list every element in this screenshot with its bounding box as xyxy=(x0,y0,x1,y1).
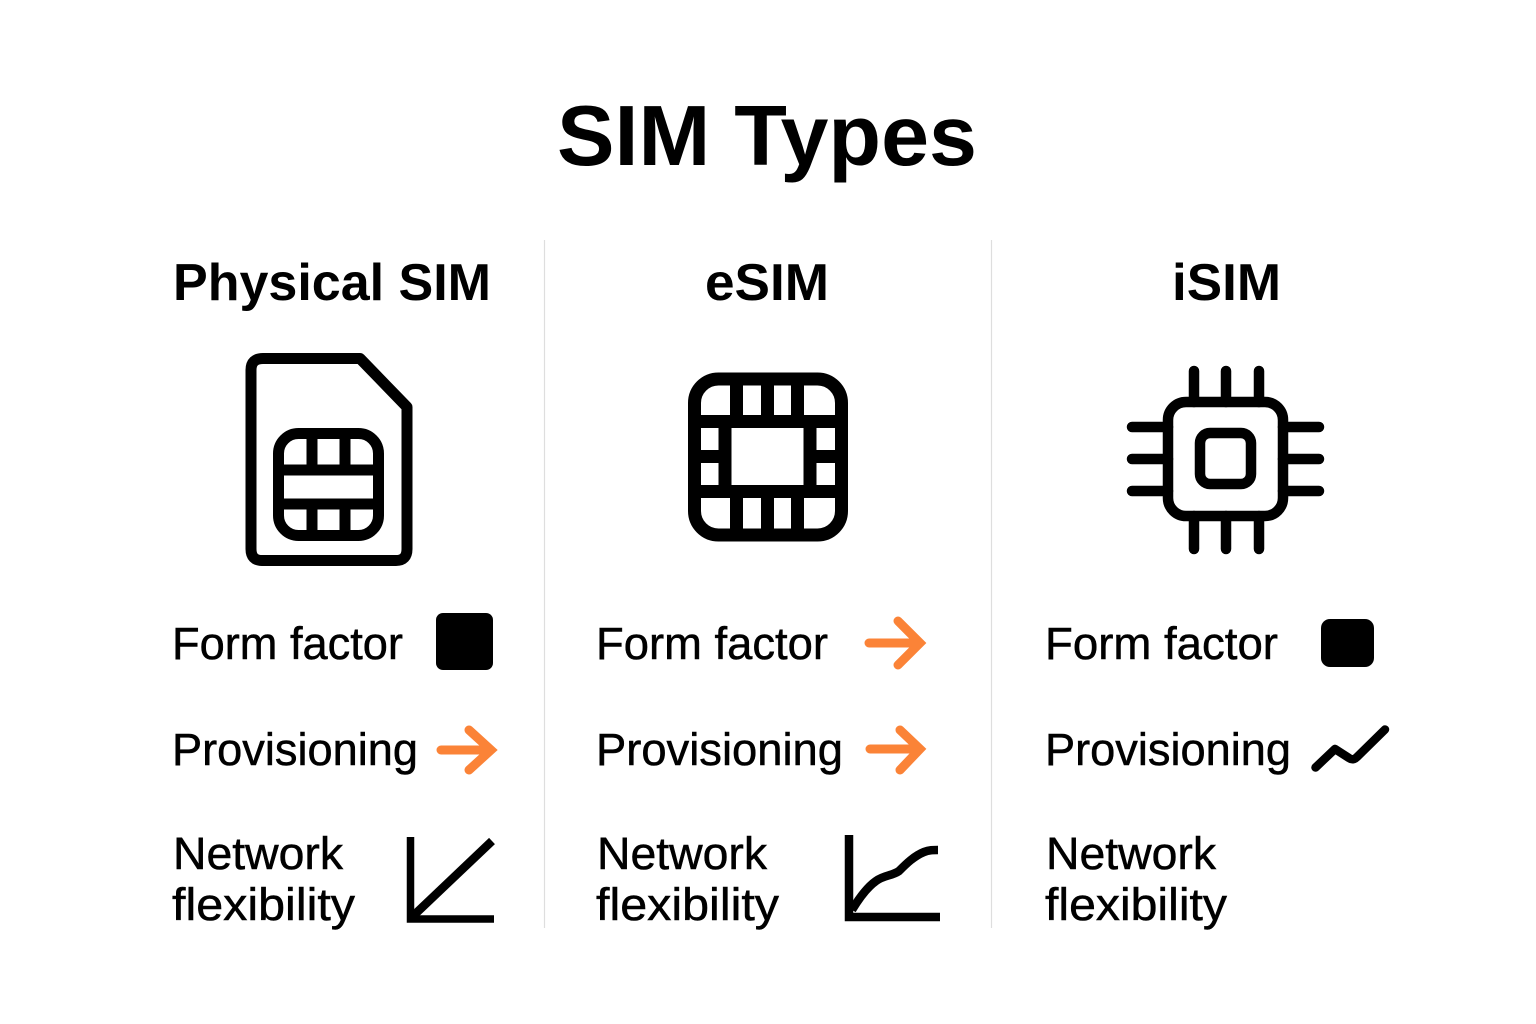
label: Provisioning: Provisioning xyxy=(172,724,418,775)
label: Provisioning: Provisioning xyxy=(596,724,843,775)
icon: orange arrow xyxy=(870,730,920,770)
label: Network flexibility: flexibility xyxy=(1045,879,1228,930)
label: Form factor: Form factor xyxy=(172,618,403,669)
icon: curved growth chart xyxy=(849,835,940,917)
icon: trend line xyxy=(1316,730,1385,768)
icon: solid square xyxy=(1321,619,1374,667)
heading: Physical SIM: Physical SIM xyxy=(173,254,491,312)
label: Form factor: Form factor xyxy=(1045,618,1278,669)
panel: iSIM xyxy=(1045,254,1385,930)
title: SIM Types xyxy=(557,89,977,184)
heading: iSIM: iSIM xyxy=(1172,254,1281,312)
label: Provisioning: Provisioning xyxy=(1045,724,1291,775)
label: Network flexibility: flexibility xyxy=(172,879,356,930)
label: Network flexibility xyxy=(1045,828,1228,930)
icon: linear growth chart xyxy=(410,837,494,919)
icon: orange arrow xyxy=(441,730,491,770)
icon: physical SIM card xyxy=(251,358,407,560)
label: Network flexibility: flexibility xyxy=(596,879,780,930)
icon: eSIM chip xyxy=(694,379,842,535)
panel: eSIM xyxy=(596,254,940,930)
label: Network flexibility xyxy=(596,828,780,930)
label: Network flexibility: Network xyxy=(1046,828,1217,879)
label: Network flexibility: Network xyxy=(597,828,768,879)
heading: eSIM: eSIM xyxy=(705,254,829,312)
icon: integrated chip xyxy=(1132,371,1319,549)
label: Network flexibility xyxy=(172,828,356,930)
panel: Physical SIM xyxy=(172,254,494,930)
icon: solid square xyxy=(436,613,493,670)
icon: orange arrow xyxy=(869,621,920,665)
label: Form factor: Form factor xyxy=(596,618,828,669)
label: Network flexibility: Network xyxy=(173,828,344,879)
